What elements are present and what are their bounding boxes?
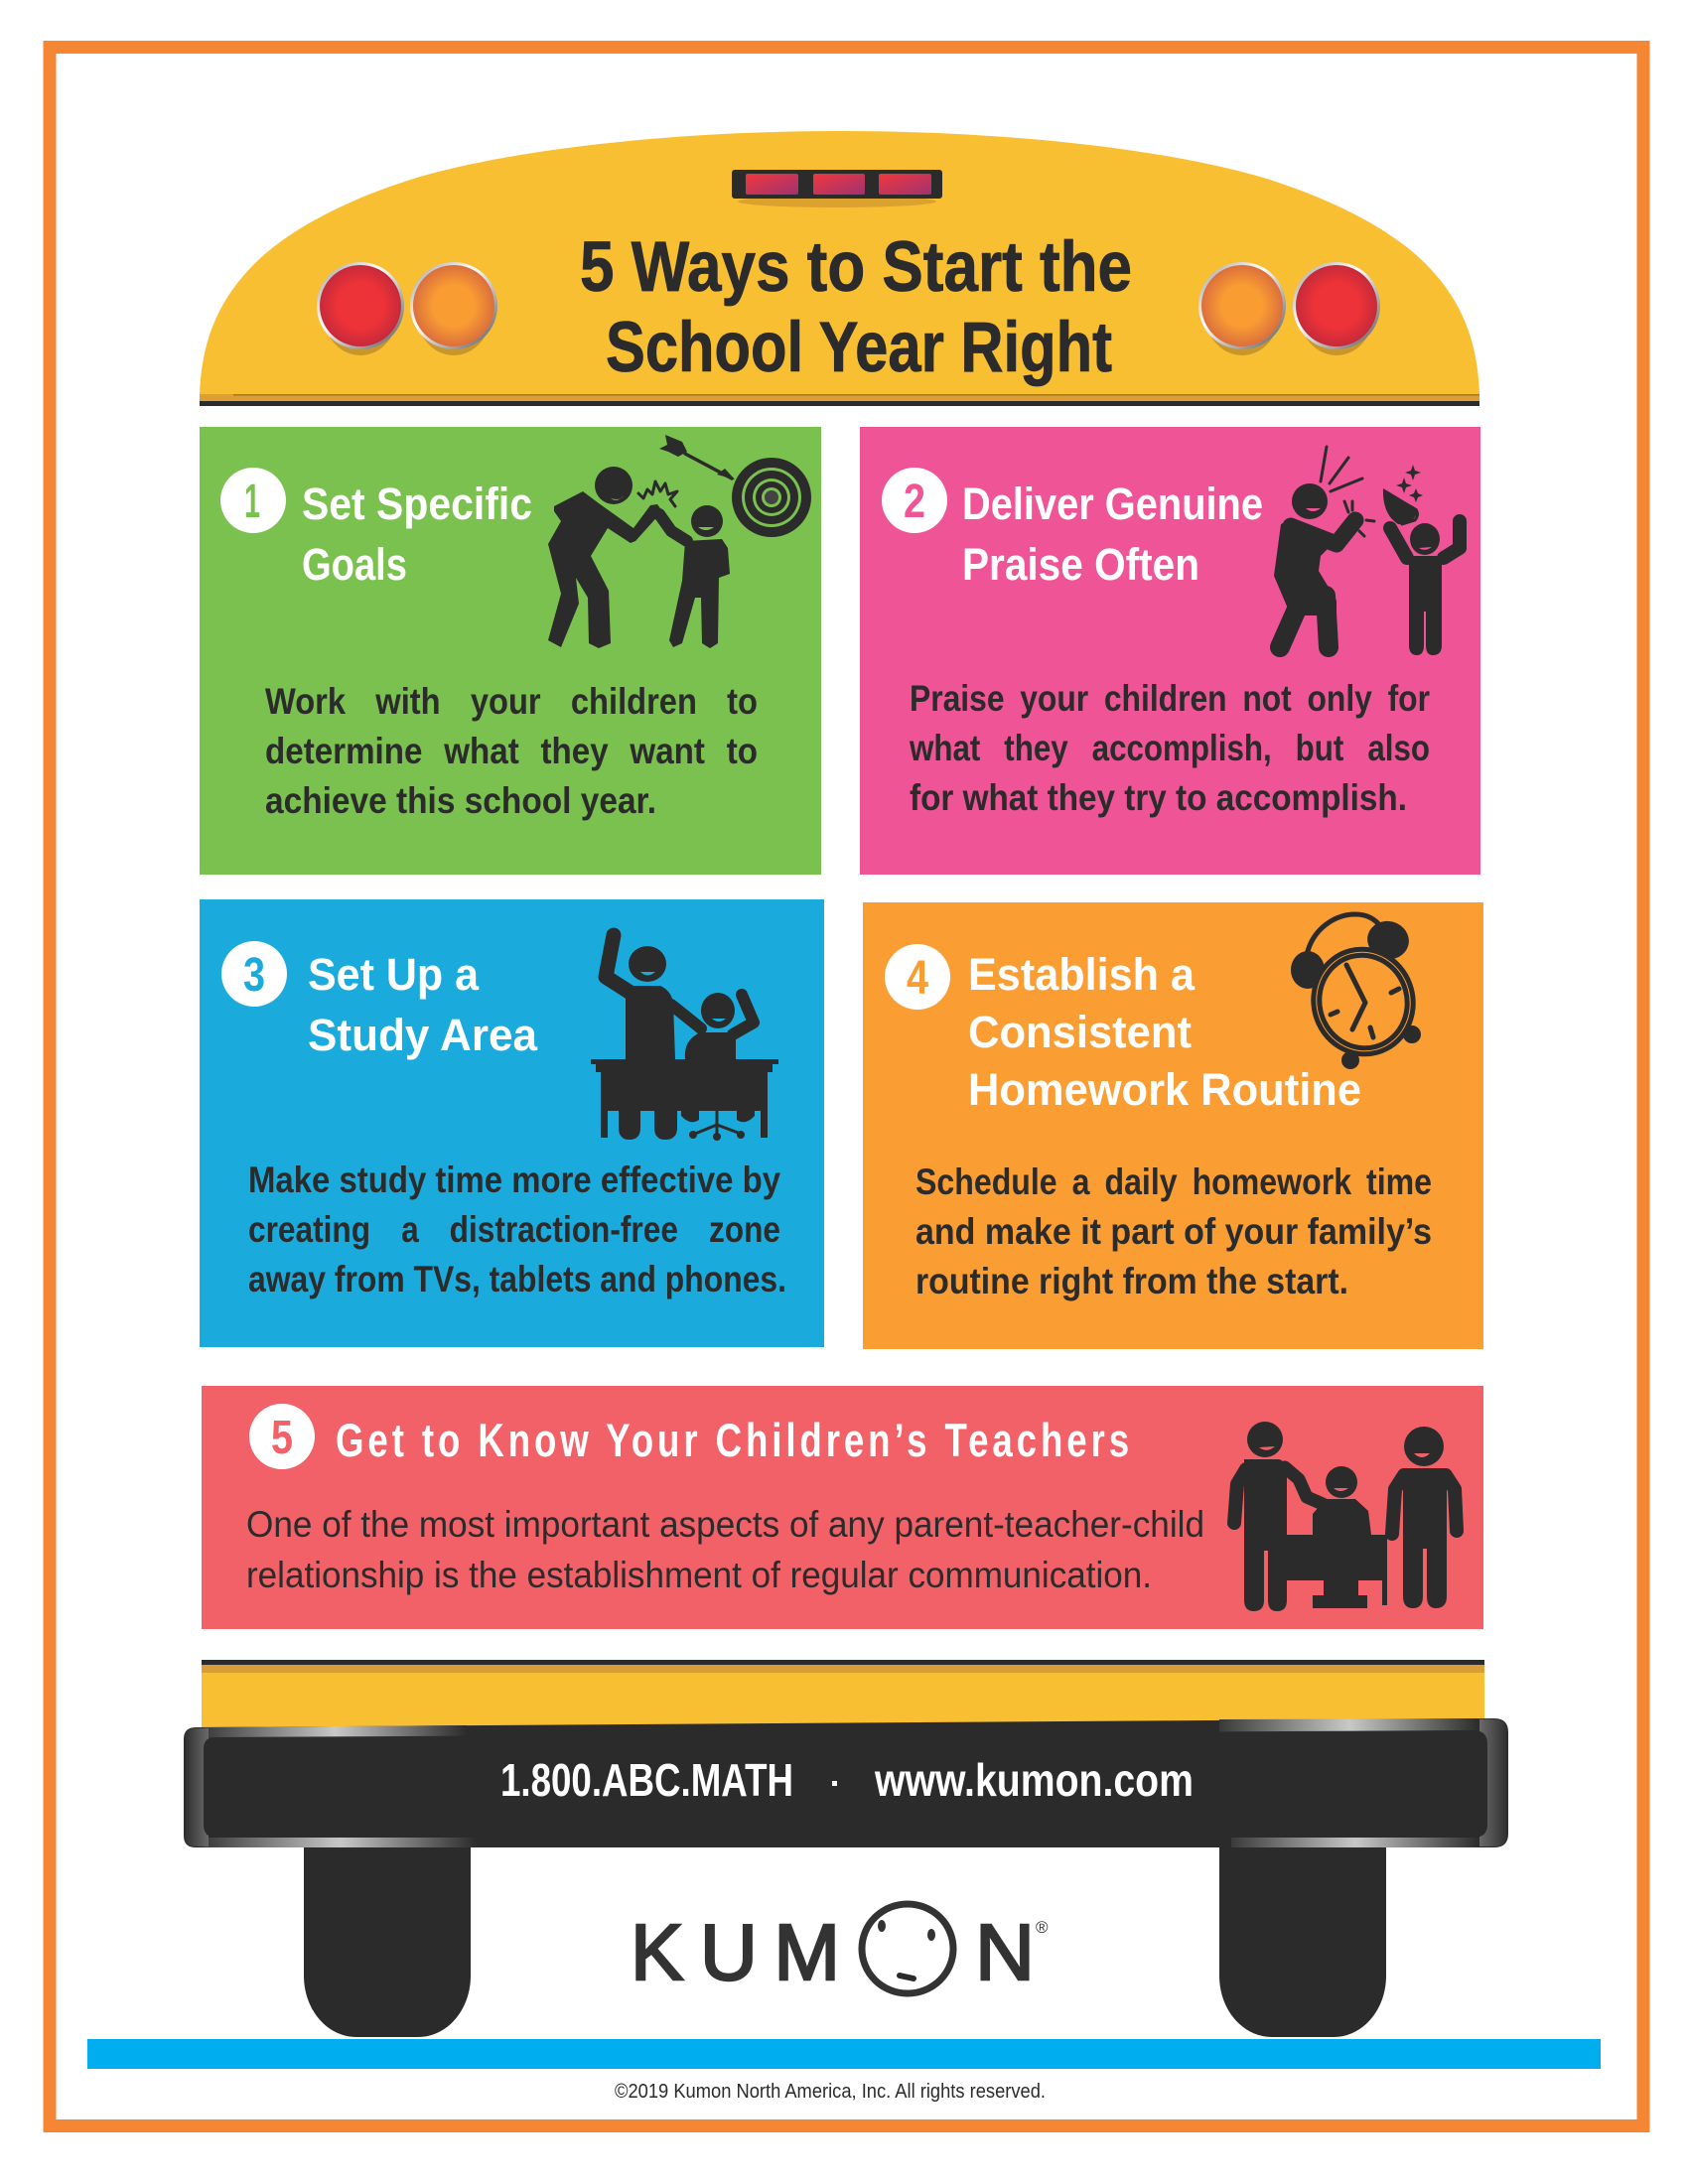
heading: Set Specific bbox=[302, 478, 532, 529]
body text bbox=[915, 1161, 1432, 1301]
heading: Get to Know Your Children’s Teachers bbox=[336, 1414, 1133, 1466]
right wheel bbox=[1219, 1842, 1386, 2037]
number badge 2: 2 bbox=[904, 476, 925, 528]
heading bbox=[308, 949, 538, 1060]
number badge 4: 4 bbox=[907, 952, 928, 1005]
number badge 5: 5 bbox=[271, 1412, 293, 1464]
heading bbox=[302, 478, 532, 590]
Kumon logo: N bbox=[975, 1908, 1035, 1996]
icon: adult and child high five with target bbox=[548, 435, 811, 648]
Kumon logo bbox=[631, 1904, 1049, 1996]
number badge 1: 1 bbox=[244, 476, 260, 528]
Kumon logo: ® bbox=[1036, 1918, 1049, 1937]
heading: Study Area bbox=[308, 1010, 538, 1060]
heading: Consistent bbox=[968, 1007, 1192, 1057]
copyright line: ©2019 Kumon North America, Inc. All rights reserved. bbox=[615, 2081, 1046, 2103]
right tail lights bbox=[1198, 262, 1380, 355]
blue road stripe bbox=[87, 2039, 1601, 2069]
icon: parent, child and teacher bbox=[1234, 1422, 1457, 1611]
heading: Set Up a bbox=[308, 949, 480, 1000]
panel 2: deliver genuine praise bbox=[860, 427, 1480, 875]
body text bbox=[246, 1504, 1204, 1595]
Kumon logo: KUM bbox=[631, 1908, 840, 1996]
number badge 4 bbox=[885, 944, 950, 1010]
heading: Deliver Genuine bbox=[962, 478, 1263, 529]
body text bbox=[909, 678, 1430, 818]
body text: away from TVs, tablets and phones. bbox=[248, 1259, 786, 1299]
panel 3: set up a study area bbox=[200, 899, 824, 1347]
title: 5 Ways to Start the bbox=[580, 228, 1132, 307]
contact text: www.kumon.com bbox=[874, 1754, 1194, 1806]
heading bbox=[962, 478, 1263, 590]
title: School Year Right bbox=[606, 309, 1112, 387]
panel 1: set specific goals bbox=[200, 427, 821, 875]
heading bbox=[968, 949, 1361, 1115]
icon: adult praising child with trophy bbox=[1274, 447, 1460, 655]
desk bbox=[1287, 1535, 1387, 1605]
title bbox=[580, 228, 1132, 387]
number badge 3: 3 bbox=[243, 949, 265, 1002]
roof shape bbox=[200, 131, 1479, 394]
body text: Praise your children not only for bbox=[910, 678, 1430, 719]
body text: One of the most important aspects of any parent-teacher-child bbox=[246, 1504, 1204, 1545]
left tail lights bbox=[317, 262, 497, 355]
heading: Praise Often bbox=[962, 539, 1199, 590]
body text: achieve this school year. bbox=[265, 780, 656, 821]
body text: Work with your children to bbox=[265, 681, 758, 722]
panel 4: consistent homework routine bbox=[863, 902, 1483, 1349]
roof trim stripes bbox=[200, 394, 1479, 406]
number badge 5 bbox=[249, 1404, 315, 1469]
body text: Make study time more effective by bbox=[248, 1160, 780, 1200]
icon: adult and child at desk bbox=[591, 935, 778, 1141]
body text: for what they try to accomplish. bbox=[910, 777, 1407, 818]
top marker light bar bbox=[732, 170, 942, 207]
heading: Homework Routine bbox=[968, 1064, 1361, 1115]
body text: relationship is the establishment of regular communication. bbox=[246, 1555, 1152, 1595]
contact text bbox=[500, 1754, 1194, 1806]
number badge 1 bbox=[220, 468, 286, 533]
number badge 3 bbox=[221, 941, 287, 1007]
body text: creating a distraction-free zone bbox=[248, 1209, 780, 1250]
body text: what they accomplish, but also bbox=[909, 728, 1430, 768]
body text: determine what they want to bbox=[265, 731, 758, 771]
panel 5: get to know teachers bbox=[202, 1386, 1483, 1629]
body text bbox=[265, 681, 758, 821]
body text: Schedule a daily homework time bbox=[915, 1161, 1432, 1202]
body text: routine right from the start. bbox=[915, 1261, 1348, 1301]
lower bus body bbox=[202, 1660, 1484, 1732]
icon: Kumon face bbox=[862, 1904, 953, 1993]
left wheel bbox=[304, 1842, 471, 2037]
number badge 2 bbox=[882, 468, 947, 533]
bumper bbox=[184, 1718, 1508, 1847]
contact text: 1.800.ABC.MATH bbox=[500, 1754, 793, 1806]
body text bbox=[248, 1160, 786, 1299]
heading: Goals bbox=[302, 539, 407, 590]
icon: alarm clock bbox=[1291, 914, 1425, 1069]
body text: and make it part of your family’s bbox=[915, 1211, 1432, 1252]
heading: Establish a bbox=[968, 949, 1196, 1000]
bus roof bbox=[200, 131, 1479, 406]
